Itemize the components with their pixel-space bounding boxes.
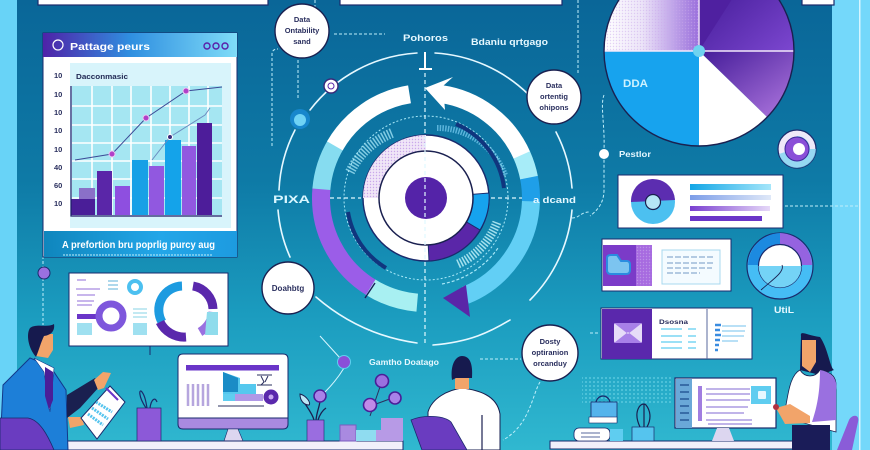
bottom centre label: Gamtho Doatago: [369, 358, 439, 367]
label node: [599, 149, 652, 159]
callout: top left: Data: [294, 15, 311, 24]
pie label: DDA: [623, 78, 648, 90]
y axis labels: 10: [54, 108, 62, 117]
y axis labels: 10: [54, 71, 62, 80]
callout: bottom: optiranion: [532, 348, 569, 357]
plant pot left: [137, 391, 161, 441]
books and pot: [574, 396, 623, 441]
top header boxes: [38, 0, 834, 5]
callout: right: [527, 70, 581, 124]
person: woman right: [773, 333, 858, 450]
gauge label: UtiL: [774, 305, 794, 316]
small ring icon: [778, 130, 816, 168]
clipboard: [81, 386, 125, 439]
outer thin ring: [278, 53, 572, 345]
dashed axes: [330, 52, 522, 345]
callout: bottom: Dosty: [540, 337, 561, 346]
chart footer: [44, 231, 237, 257]
callout: bottom: [522, 325, 578, 381]
dotted texture: [582, 377, 672, 404]
panel: envelope: Dsosna: [659, 320, 689, 326]
callout: bottom: orcanduy: [533, 359, 568, 368]
chart plot background: [70, 63, 231, 228]
chart header: [43, 33, 237, 57]
callout: top left: sand: [293, 37, 311, 46]
top label: Pohoros: [403, 33, 448, 43]
pencil pot: [632, 404, 654, 441]
chart header: Pattage peurs: [70, 41, 150, 53]
callout: right: Data: [546, 81, 563, 90]
y axis labels: [54, 71, 62, 208]
chart bars: [71, 86, 222, 216]
chart panel: [43, 33, 237, 257]
panel: document: [602, 239, 731, 291]
right light strip: [832, 0, 870, 450]
left light strip: [0, 0, 17, 450]
panel: lower-left dashboard: [69, 273, 228, 355]
inner text arcs: [344, 116, 508, 284]
callout: dashboard: Doahbtg: [272, 284, 304, 293]
panel stand: [149, 346, 151, 355]
chair: [0, 418, 54, 450]
top right label: Bdaniu qrtgago: [471, 37, 548, 48]
callout: right: ortentig: [540, 92, 568, 101]
y axis labels: 60: [54, 181, 62, 190]
callout: dashboard: [262, 262, 314, 314]
pie chart: [604, 0, 794, 146]
y axis labels: 10: [54, 199, 62, 208]
pointer marker: [419, 52, 432, 69]
purple link node: [320, 336, 350, 392]
central pie ring: [363, 135, 489, 261]
purple arrow head: [443, 285, 470, 317]
y axis labels: 10: [54, 126, 62, 135]
callout: top left: [275, 4, 329, 58]
plant pot center: [300, 390, 326, 441]
callout: right: ohipons: [539, 103, 569, 112]
chart line series: [75, 87, 222, 160]
person: man back: [411, 356, 500, 450]
right desk monitor: [675, 378, 776, 441]
node icon: [324, 79, 338, 93]
purple/cyan boundary: [365, 283, 375, 298]
white arrow head: [425, 77, 453, 110]
panel: donut and bars: [618, 175, 783, 228]
y axis labels: 10: [54, 90, 62, 99]
connected nodes: [364, 374, 401, 416]
cycle diagram: [273, 33, 576, 345]
desk left: [67, 441, 403, 450]
ring segments: [281, 53, 571, 343]
gauge donut: [747, 233, 813, 316]
purple node: [38, 267, 50, 325]
chart grid: [72, 86, 222, 215]
blue node: [290, 109, 310, 129]
stacked blocks: [340, 418, 403, 441]
panel: envelope: [601, 308, 752, 359]
right label: a dcand: [533, 195, 576, 206]
center desk monitor: [178, 354, 288, 441]
desk right: [550, 441, 800, 449]
y axis labels: 10: [54, 145, 62, 154]
y axis labels: 40: [54, 163, 62, 172]
callout: top left: Ontability: [285, 26, 320, 35]
chart footer: A prefortion bru poprlig purcy aug: [62, 240, 215, 251]
chart subtitle: Dacconmasic: [76, 72, 128, 81]
label node: Pestlor: [619, 149, 652, 159]
left label: PIXA: [273, 194, 310, 206]
person: man left: [0, 324, 125, 450]
